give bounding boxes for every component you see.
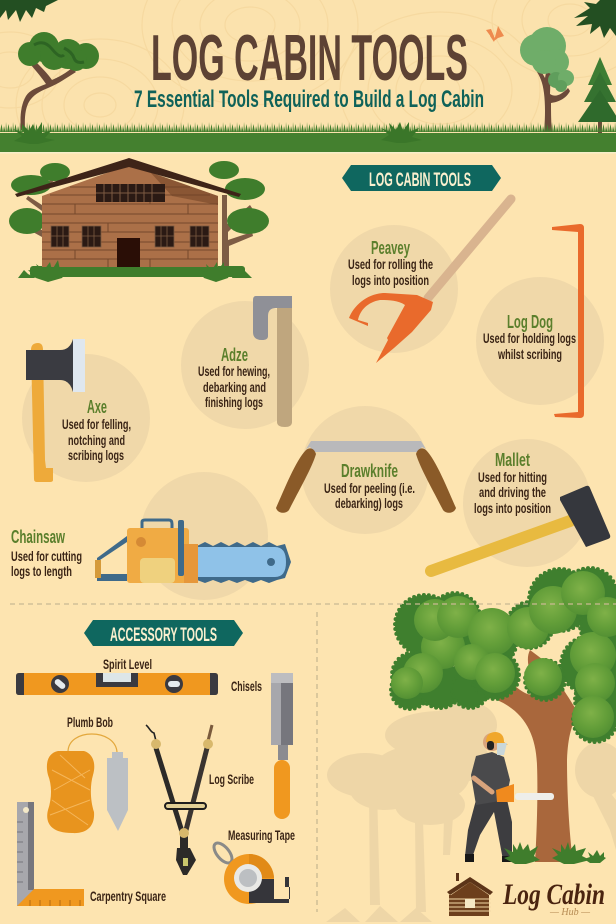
loft window	[96, 184, 165, 202]
agave left	[13, 122, 55, 144]
axe	[22, 339, 150, 482]
adze label	[198, 345, 270, 410]
door	[117, 238, 140, 267]
chisel	[271, 673, 293, 819]
adze	[181, 296, 309, 429]
trees behind cabin	[9, 161, 269, 266]
pine tree	[578, 57, 616, 134]
drawknife label: Used for peeling (i.e.	[324, 481, 415, 496]
mallet	[431, 439, 610, 571]
trunk	[497, 650, 578, 862]
banner: log cabin tools: LOG CABIN TOOLS	[369, 170, 471, 191]
mallet label	[474, 450, 551, 516]
section divider vertical	[316, 612, 318, 912]
logo sub-mark: — Hub —	[549, 907, 590, 918]
chainsaw label	[11, 527, 82, 579]
agave center	[381, 122, 422, 143]
adze label: Adze	[221, 345, 248, 365]
drawknife label	[324, 461, 415, 511]
windows	[51, 226, 209, 247]
banner: accessory tools: ACCESSORY TOOLS	[110, 625, 217, 646]
log dog	[476, 224, 604, 418]
chainsaw label: Used for cutting	[11, 549, 82, 564]
measuring tape	[211, 840, 290, 904]
grass band	[0, 122, 616, 154]
header background: wood rings	[0, 0, 616, 133]
mallet label: and driving the	[479, 485, 546, 500]
log dog label: whilst scribing	[497, 347, 562, 362]
peavey label: Used for rolling the	[348, 257, 433, 272]
banner: log cabin tools	[342, 165, 501, 191]
agaves at tree base	[504, 842, 606, 864]
woodcutter	[465, 732, 554, 862]
chainsaw label: logs to length	[11, 564, 72, 579]
palm top right	[574, 0, 616, 38]
silhouette trees	[326, 701, 616, 922]
label: carpentry square: Carpentry Square	[90, 889, 166, 904]
plumb bob	[47, 734, 128, 833]
spirit level	[16, 673, 218, 695]
roof	[15, 158, 241, 197]
axe label: scribing logs	[68, 448, 124, 463]
label: chisels: Chisels	[231, 679, 262, 694]
ground	[30, 266, 245, 277]
palm top left	[0, 0, 58, 22]
cabin illustration	[9, 158, 269, 282]
mid foliage highlights	[391, 571, 616, 738]
log dog label: Log Dog	[507, 312, 553, 332]
mallet label: Mallet	[495, 450, 530, 470]
adze label: debarking and	[203, 380, 266, 395]
adze label: finishing logs	[205, 395, 263, 410]
dark foliage	[391, 568, 616, 742]
axe label: Used for felling,	[62, 417, 131, 432]
logo: log cabin hub	[447, 873, 605, 918]
mallet label: Used for hitting	[478, 470, 547, 485]
log scribe	[146, 725, 213, 875]
label: measuring tape: Measuring Tape	[228, 828, 295, 843]
peavey label	[348, 238, 433, 288]
adze label: Used for hewing,	[198, 364, 270, 379]
chainsaw label: Chainsaw	[11, 527, 66, 547]
chainsaw	[11, 472, 291, 600]
right header tree	[520, 27, 574, 132]
log dog label	[483, 312, 576, 362]
butterfly	[486, 26, 504, 42]
axe label: notching and	[68, 433, 125, 448]
left header tree	[18, 32, 99, 130]
axe label	[62, 397, 131, 463]
section divider horizontal	[10, 603, 616, 605]
axe label: Axe	[87, 397, 107, 417]
banner: accessory tools	[84, 620, 243, 646]
drawknife label: debarking) logs	[335, 496, 403, 511]
peavey label: Peavey	[371, 238, 410, 258]
peavey label: logs into position	[352, 273, 429, 288]
drawknife label: Drawknife	[341, 461, 398, 481]
label: spirit level: Spirit Level	[103, 657, 152, 672]
peavey	[330, 199, 511, 363]
shrubs	[18, 260, 252, 282]
mallet label: logs into position	[474, 501, 551, 516]
label: plumb bob: Plumb Bob	[67, 715, 113, 730]
large tree	[391, 568, 616, 862]
carpentry square	[17, 802, 84, 906]
label: log scribe: Log Scribe	[209, 772, 254, 787]
drawknife	[276, 406, 456, 534]
logo cabin icon	[447, 873, 493, 916]
walls	[42, 165, 218, 267]
